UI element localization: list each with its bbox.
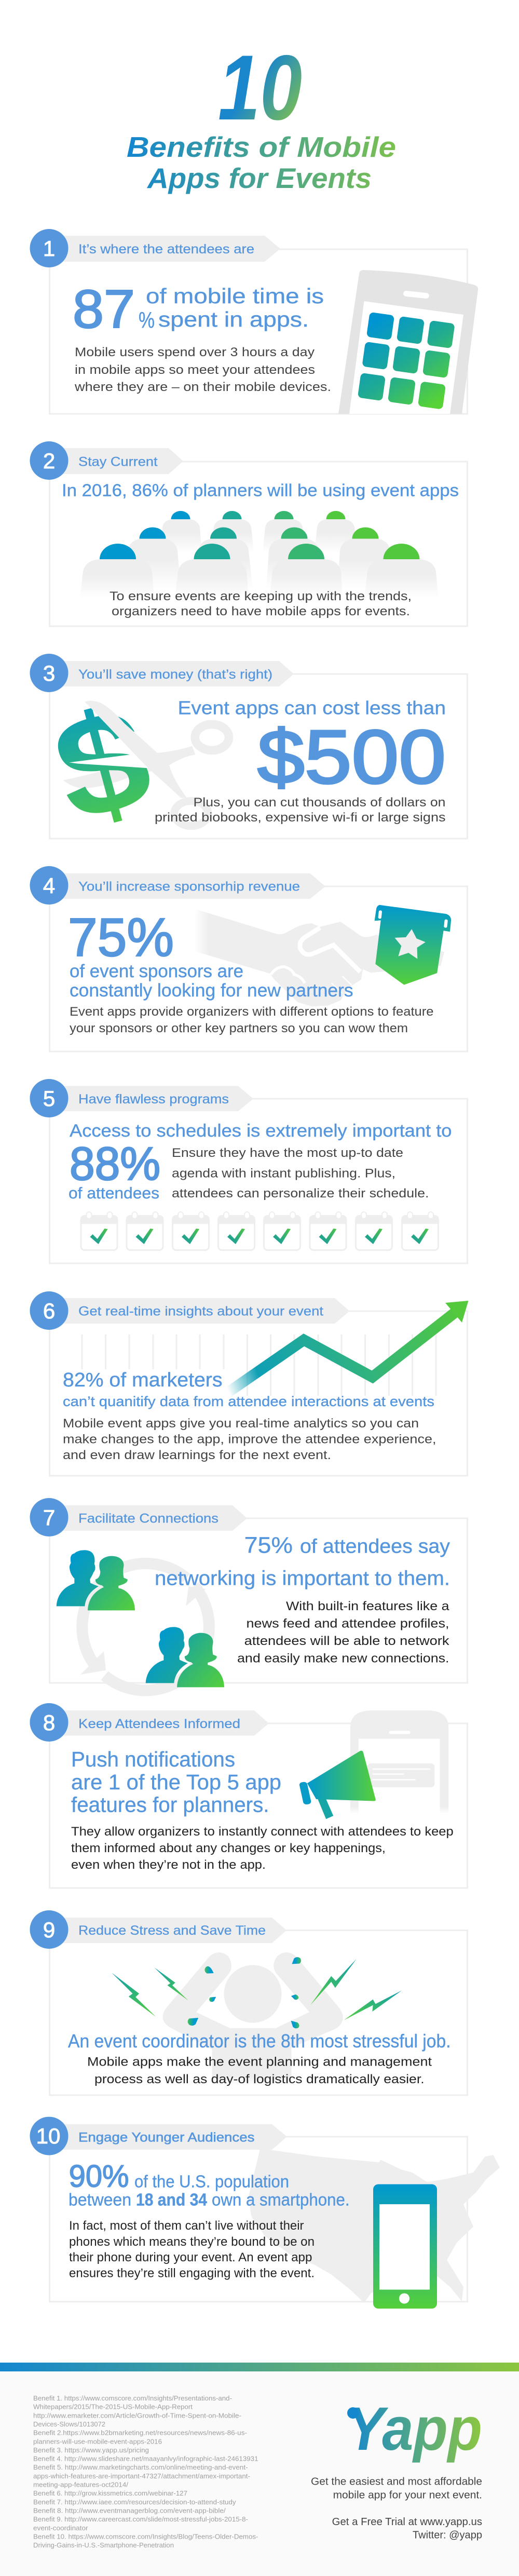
references: Benefit 5. http://www.marketingcharts.com/online/meeting-and-event- [33,2463,248,2471]
references: event-coordinator [33,2524,88,2532]
body text: phones which means they’re bound to be on [69,2235,315,2249]
references: meeting-app-features-oct2014/ [33,2481,128,2488]
body text: their phone during your event. An event app [69,2250,312,2264]
stat: 75% networking: networking is important to them. [155,1567,450,1590]
body text: With built-in features like a [286,1599,449,1613]
body text: attendees can personalize their schedule. [172,1186,429,1201]
references [33,2394,258,2549]
references: Benefit 8. http://www.eventmanagerblog.com/event-app-bible/ [33,2506,226,2514]
stat: 90% own a smartphone: 90% [69,2159,129,2193]
body text: and even draw learnings for the next event. [63,1448,331,1462]
panel: benefit 1 [30,229,478,414]
icon: phone with notification [350,1710,448,1814]
body text: In fact, most of them can’t live without their [69,2219,304,2233]
panel: benefit 2: 2 [43,449,55,473]
stat: push notifications: are 1 of the Top 5 app [71,1770,281,1794]
stat: 90% own a smartphone [69,2159,350,2209]
body text: Mobile apps make the event planning and management [87,2055,432,2069]
references: Benefit 9. http://www.careercast.com/slide/most-stressful-jobs-2015-8- [33,2515,248,2523]
body text: news feed and attendee profiles, [246,1617,449,1631]
call to action: Twitter: @yapp [413,2530,482,2541]
references: Benefit 1. https://www.comscore.com/Insights/Presentations-and- [33,2394,232,2402]
panel: benefit 8 [30,1703,467,1888]
body text: them informed about any changes or key happenings, [71,1841,386,1855]
stat: push notifications [71,1747,281,1816]
body text: attendees will be able to network [244,1634,450,1648]
panel: benefit 8: 8 [43,1710,55,1735]
stat: 90% own a smartphone: 18 and 34 [136,2190,208,2209]
stat: 87% of mobile time: of mobile time is [146,284,324,308]
stat: 88% of attendees: of attendees [69,1184,159,1202]
body text: make changes to the app, improve the attendee experience, [63,1432,436,1447]
panel: benefit 2: Stay Current [78,455,158,469]
icon: people pair, bottom [146,1627,224,1687]
stat: 87% of mobile time [73,279,324,340]
panel: benefit 6 [30,1291,468,1476]
body text: your sponsors or other key partners so you can wow them [70,1021,408,1035]
body text [237,1599,450,1666]
title: Benefits of Mobile [127,131,396,163]
body text [74,345,331,394]
call to action [311,2476,482,2541]
body text [155,795,445,825]
body text: ensures they’re still engaging with the event. [69,2266,315,2281]
tag and number: Engage Younger Audiences [78,2130,254,2145]
body text: even when they’re not in the app. [71,1858,266,1872]
body text: in mobile apps so meet your attendees [75,363,315,377]
call to action: mobile app for your next event. [333,2489,482,2501]
body text [70,1005,433,1035]
stat: 75% of sponsors: 75% [68,908,174,968]
body text [87,2055,432,2086]
references: Benefit 3. https://www.yapp.us/pricing [33,2446,149,2454]
panel: benefit 9: 9 [43,1918,55,1942]
panel: benefit 9 [30,1910,467,2095]
panel: benefit 1: It’s where the attendees are [78,242,254,257]
title: Apps for Events [146,162,372,194]
stat: 75% networking: of attendees say [300,1535,450,1557]
body text: To ensure events are keeping up with the trends, [110,589,412,603]
references: Benefit 10. https://www.comscore.com/Insights/Blog/Teens-Older-Demos- [33,2532,258,2540]
icon: scissors cutting a dollar sign [39,675,229,852]
body text: Event apps provide organizers with different options to feature [70,1005,433,1019]
stat: push notifications: features for planners. [71,1792,269,1816]
body text: process as well as day-of logistics dramatically easier. [94,2072,425,2086]
stat: 75% networking: 75% [244,1532,293,1558]
illustration: US map [248,2150,500,2303]
panel: benefit 4: 4 [43,873,55,898]
body text: Mobile event apps give you real-time analytics so you can [63,1417,419,1431]
chart: rising line with grid [82,1301,468,1396]
panel: benefit 9: Reduce Stress and Save Time [78,1923,266,1938]
references: Driving-Gains-in-U.S.-Smartphone-Penetration [33,2541,174,2549]
gradient bar [0,2363,519,2371]
stat: 90% own a smartphone: own a smartphone. [212,2190,350,2209]
references: Whitepapers/2015/The-2015-US-Mobile-App-Report [33,2403,193,2411]
title: 10 [218,36,302,139]
references: Benefit 2.https://www.b2bmarketing.net/resources/news/news-86-us- [33,2429,247,2437]
icon: scissors cutting a dollar sign: $ [39,675,166,852]
icon: phone with app grid [338,270,478,414]
references: apps-which-features-are-important-47327/attachment/amex-important- [33,2472,250,2480]
panel: benefit 3: 3 [43,661,55,685]
stat: push notifications: Push notifications [71,1747,235,1771]
stat: 75% networking [155,1532,450,1590]
icon: people pair, top [57,1550,135,1610]
stat: 90% own a smartphone: of the U.S. population [134,2172,289,2191]
heading: An event coordinator is the 8th most stressful job. [68,2030,451,2052]
panel: benefit 6: 6 [43,1299,55,1323]
body text [69,2219,315,2281]
stat: 82% of marketers [63,1369,434,1409]
body text: Ensure they have the most up-to date [172,1146,403,1160]
references: http://www.emarketer.com/Article/Growth-of-Time-Spent-on-Mobile- [33,2411,241,2419]
illustration: stressed person [112,1952,402,2086]
stat: 87% of mobile time: % [139,307,155,333]
call to action: Get a Free Trial at www.yapp.us [332,2516,482,2528]
panel: benefit 7: 7 [43,1505,55,1530]
icon: circular arrows [80,1563,209,1691]
body text [110,589,412,618]
panel: benefit 5 [30,1079,467,1263]
panel: benefit 4: You’ll increase sponsorhip revenue [78,880,300,894]
stat: 82% of marketers: can’t quanitify data from attendee interactions at events [63,1394,434,1409]
stat: 75% of sponsors: constantly looking for new partners [70,980,353,1001]
references: Benefit 7. http://www.iaee.com/resources/decision-to-attend-study [33,2498,236,2506]
panel: benefit 3 [30,654,467,852]
tag and number [30,2117,287,2155]
body text: where they are – on their mobile devices. [74,380,331,394]
logo: Yapp: Yapp [347,2395,482,2463]
icon: smartphone [373,2184,437,2309]
call to action: Get the easiest and most affordable [311,2476,482,2488]
heading: In 2016, 86% of planners will be using event apps [62,481,459,500]
icon: ribbon badge with star [375,905,451,985]
body text: agenda with instant publishing. Plus, [172,1166,395,1181]
panel: benefit 7 [30,1498,467,1691]
stat: 75% of sponsors: of event sponsors are [70,961,243,981]
panel: benefit 7: Facilitate Connections [78,1511,218,1526]
panel: benefit 10 [30,2117,500,2309]
panel: benefit 8: Keep Attendees Informed [78,1717,240,1731]
body text: and easily make new connections. [237,1651,449,1666]
panel: benefit 6: Get real-time insights about your event [78,1304,323,1319]
body text [71,1825,454,1872]
body text: Plus, you can cut thousands of dollars on [193,795,445,810]
title [127,36,396,194]
references: Devices-Slows/1013072 [33,2420,105,2428]
illustration: audience [80,511,438,598]
icon: megaphone [299,1751,376,1819]
references: planners-will-use-mobile-event-apps-2016 [33,2437,162,2445]
icon: handshake [194,909,444,1006]
references: Benefit 4. http://www.slideshare.net/maayanlvy/infographic-last-24613931 [33,2455,258,2463]
body text: printed biobooks, expensive wi-fi or large signs [155,811,445,825]
tag and number: 10 [36,2124,60,2148]
stat: 88% of attendees: 88% [70,1138,160,1190]
body text: organizers need to have mobile apps for events. [112,604,410,618]
references: Benefit 6. http://grow.kissmetrics.com/webinar-127 [33,2489,187,2497]
panel: benefit 2 [30,441,467,626]
stat: 90% own a smartphone: between [69,2190,131,2209]
stat: 87% of mobile time: 87 [73,279,135,340]
heading: Event apps can cost less than [177,697,446,719]
body text [172,1146,429,1201]
stat: 82% of marketers: 82% of marketers [63,1369,222,1391]
stat: $500: $500 [257,714,446,799]
footer [0,2363,519,2576]
body text [63,1417,436,1462]
stat: 87% of mobile time: spent in apps. [158,307,309,331]
heading: Access to schedules is extremely important to [70,1121,452,1141]
body text: They allow organizers to instantly connect with attendees to keep [71,1825,454,1839]
stat: 75% of sponsors [68,908,353,1001]
icon row: calendars with check marks [81,1212,439,1250]
body text: Mobile users spend over 3 hours a day [75,345,315,359]
panel: benefit 5: Have flawless programs [78,1092,229,1107]
panel: benefit 1: 1 [43,236,55,261]
panel: benefit 4 [30,866,467,1051]
panel: benefit 3: You’ll save money (that’s right) [78,667,272,682]
panel: benefit 5: 5 [43,1086,55,1111]
